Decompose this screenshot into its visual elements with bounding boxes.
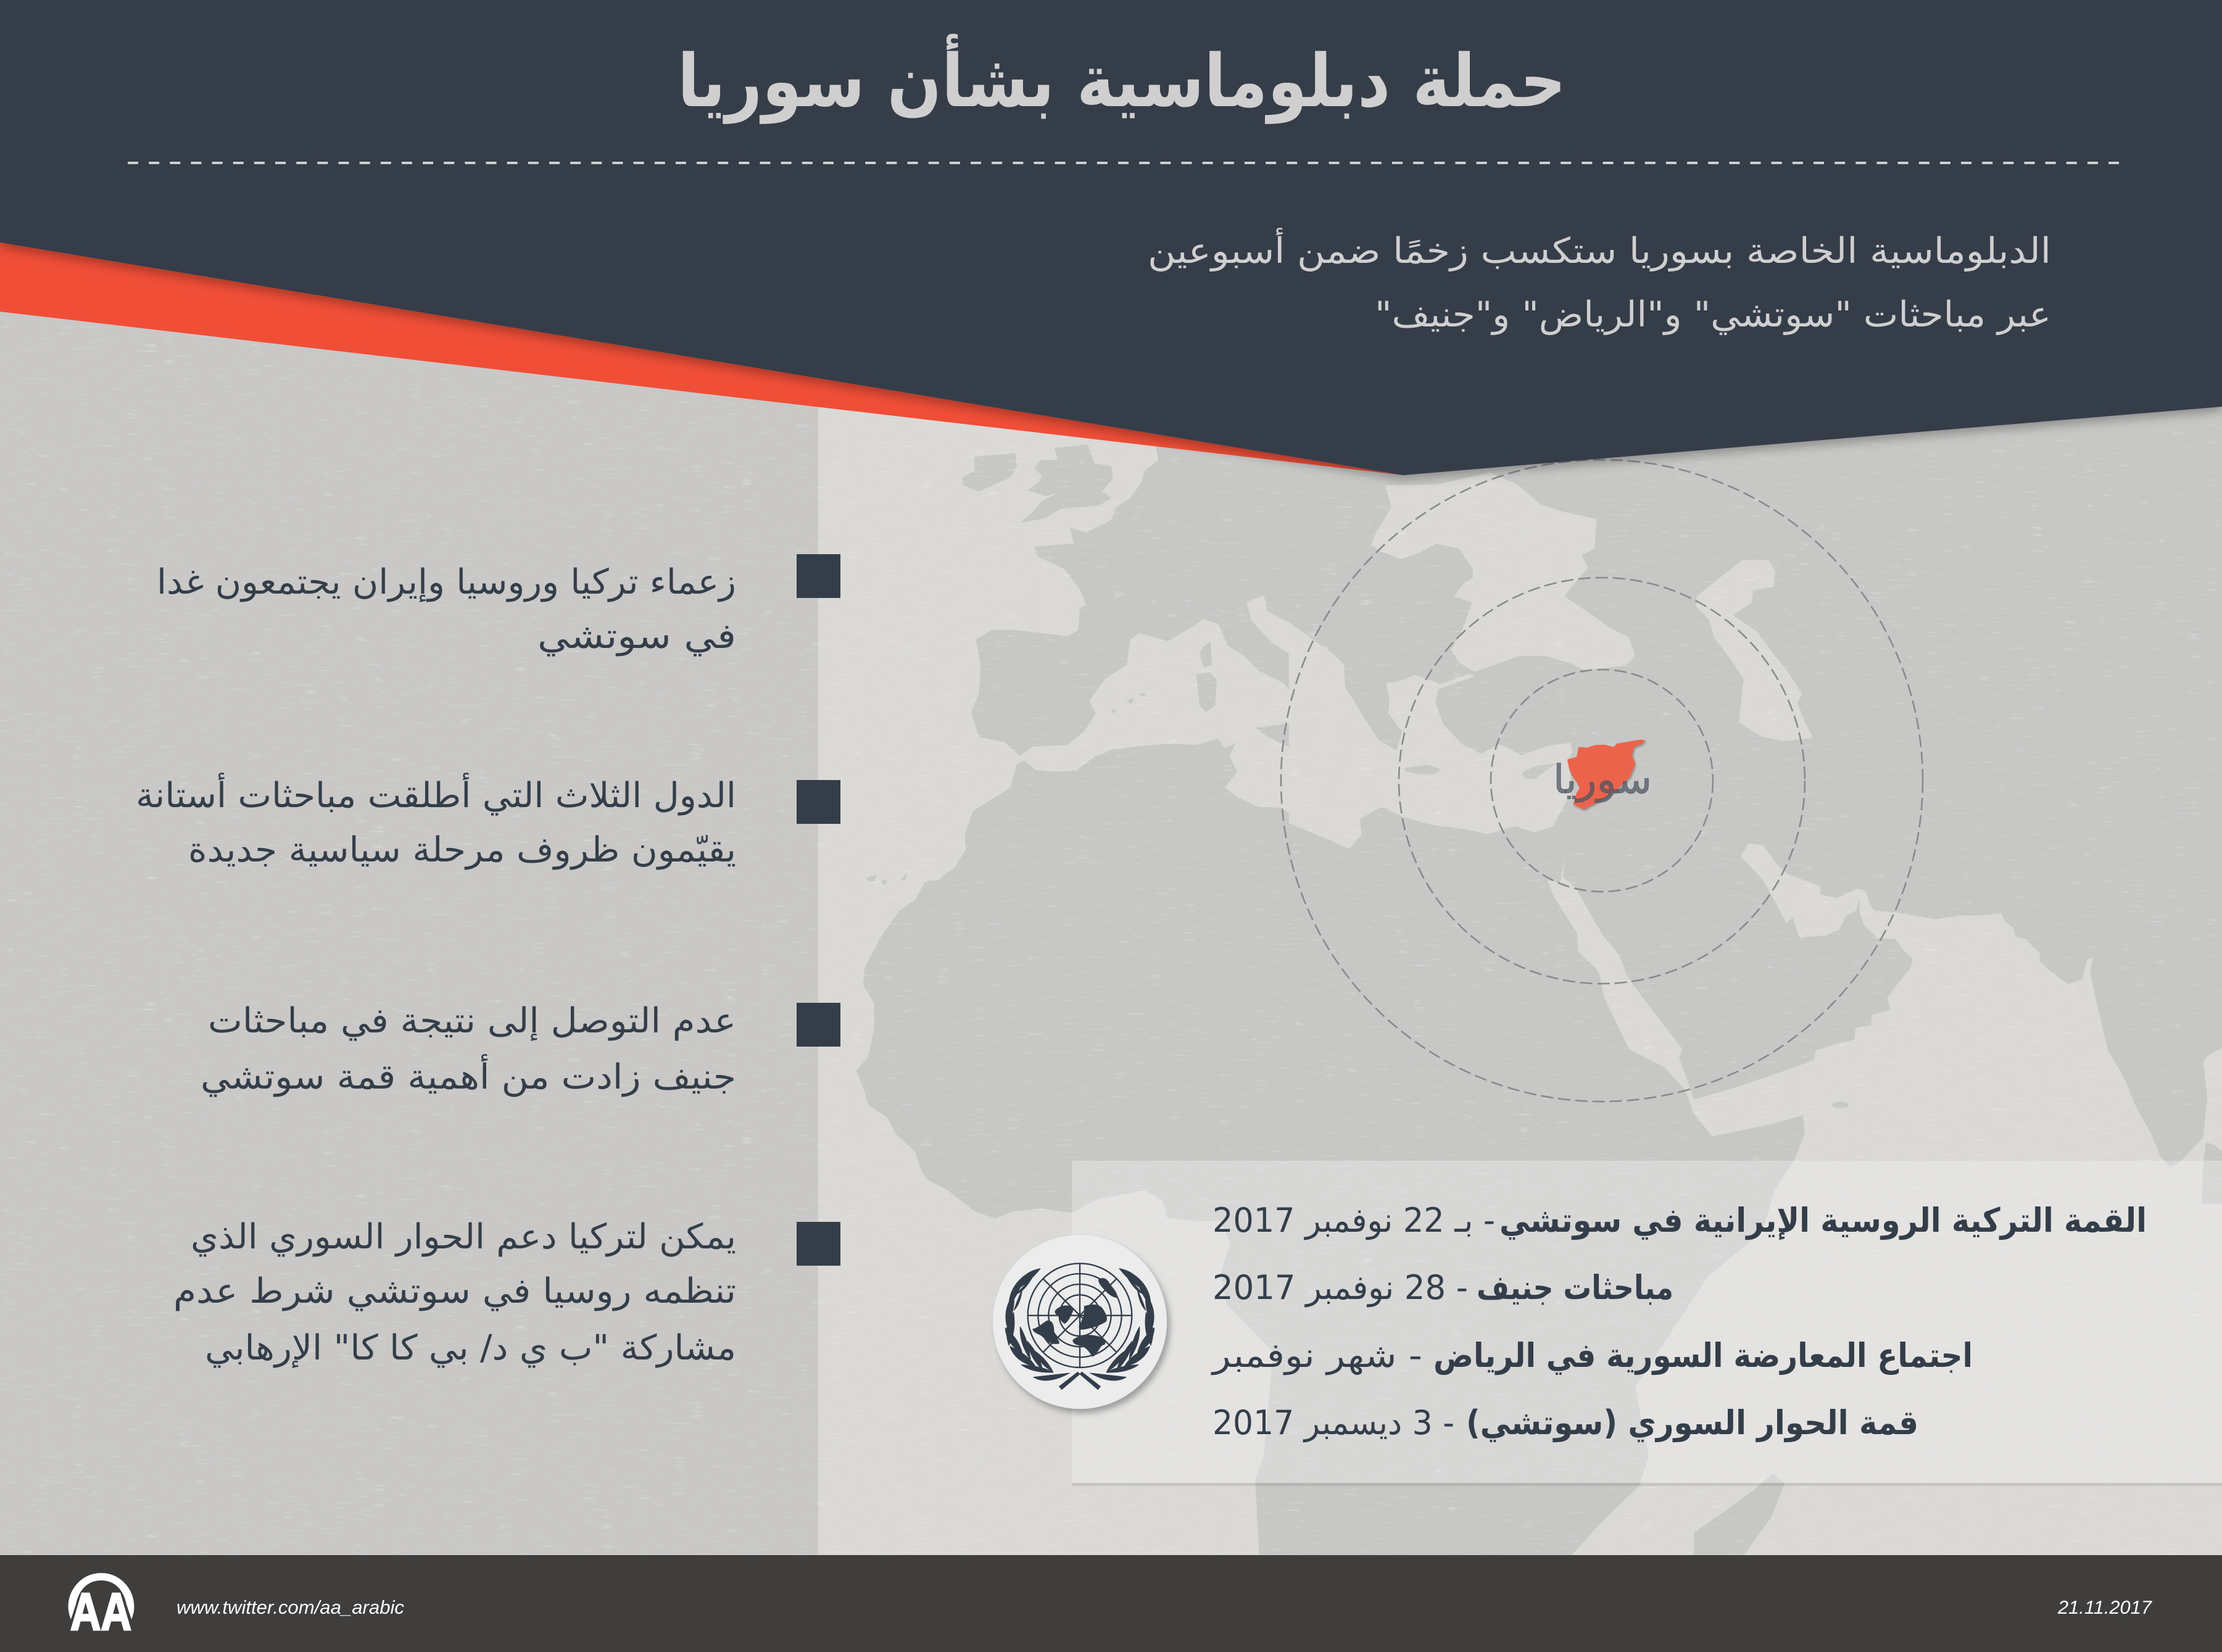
intro text [1148,228,2051,335]
Persian Gulf [1741,844,1820,936]
Corsica [1200,641,1212,668]
Great Britain [1020,444,1113,523]
bullet 4: تنظمه روسيا في سوتشي شرط عدم [173,1271,736,1311]
footer bar [0,1555,2222,1652]
schedule line 1: القمة التركية الروسية الإيرانية في سوتشي [1499,1201,2147,1240]
bullet 2: الدول الثلاث التي أطلقت مباحثات أستانة [136,773,736,816]
laurel left [1005,1269,1080,1390]
header panel [0,0,2222,475]
red accent wedge [0,243,1403,475]
bullet 3 [201,1001,840,1097]
left shaded band [0,247,818,1555]
laurel right [1080,1269,1155,1390]
range circles [1281,460,1923,1102]
bullet 1: في سوتشي [537,616,736,657]
Southeast Asia edge [2202,1142,2222,1204]
bullet 4: يمكن لتركيا دعم الحوار السوري الذي [191,1217,736,1257]
footer date: 21.11.2017 [2057,1596,2153,1618]
schedule line 2: - 28 نوفمبر 2017 [1213,1268,1468,1307]
icon: UN emblem [993,1235,1167,1409]
northern Red Sea [1532,855,1683,1072]
icon: AA logo: AA [70,1583,131,1642]
footer link: www.twitter.com/aa_arabic [176,1596,404,1618]
Sardinia [1196,673,1217,712]
dashed divider [128,162,2119,164]
world map [800,309,2222,1630]
bullet 3: جنيف زادت من أهمية قمة سوتشي [201,1054,736,1097]
schedule line 1: - بـ 22 نوفمبر 2017 [1213,1201,1495,1240]
Eastern Mediterranean and Aegean [1289,641,1572,848]
intro text: عبر مباحثات "سوتشي" و"الرياض" و"جنيف" [1375,294,2051,335]
Madagascar [1694,1473,1785,1555]
Balearic islands [1111,692,1145,714]
Atlantic off West Africa and Gulf of Guinea [805,786,1273,1554]
Sicily [1256,723,1294,748]
Caspian Sea [1696,560,1813,741]
Crete [1405,765,1441,774]
globe continents [1032,1278,1117,1356]
paper texture speckle [0,235,2222,1555]
bullet 1: زعماء تركيا وروسيا وإيران يجتمعون غدا [157,562,736,603]
schedule line 4: قمة الحوار السوري (سوتشي) [1466,1403,1918,1442]
title: حملة دبلوماسية بشأن سوريا [678,33,1566,124]
Canary Islands [866,873,907,885]
bullet 4: مشاركة "ب ي د/ بي كا كا" الإرهابي [205,1328,736,1368]
intro text: الدبلوماسية الخاصة بسوريا ستكسب زخمًا ضمن أسبوعين [1148,228,2051,272]
schedule line 3: - شهر نوفمبر [1211,1336,1422,1375]
schedule line 2: مباحثات جنيف [1477,1268,1673,1307]
bullet 4 [173,1217,840,1368]
bullet 1 [157,554,840,657]
schedule panel [1072,1161,2222,1486]
map land mass [818,309,2222,1555]
Black Sea region [1371,473,1635,672]
Cyprus [1522,763,1556,779]
bullet 3: عدم التوصل إلى نتيجة في مباحثات [208,1001,736,1042]
North Atlantic and western Mediterranean [800,381,1419,885]
schedule line 2 [1213,1268,1673,1307]
icon: Syria shape [1567,739,1646,810]
schedule line 3 [1211,1336,1973,1376]
bullet 2: يقيّمون ظروف مرحلة سياسية جديدة [188,830,736,870]
bullet 2 [136,773,840,870]
Arabian Sea and Bay of Bengal [1784,879,2222,1204]
schedule line 4: - 3 ديسمبر 2017 [1213,1403,1454,1442]
schedule line 1 [1213,1201,2147,1240]
bullet list [136,554,840,1368]
Ireland [962,453,1017,492]
Syria label: سوريا [1553,757,1652,803]
schedule line 3: اجتماع المعارضة السورية في الرياض [1433,1336,1973,1376]
lower Red Sea and Gulf of Aden [1581,932,1807,1137]
East African coast and southern Indian Ocean [1572,1114,2222,1630]
Socotra [1832,1102,1849,1108]
globe grid [1028,1263,1132,1368]
schedule line 4 [1213,1403,1918,1442]
